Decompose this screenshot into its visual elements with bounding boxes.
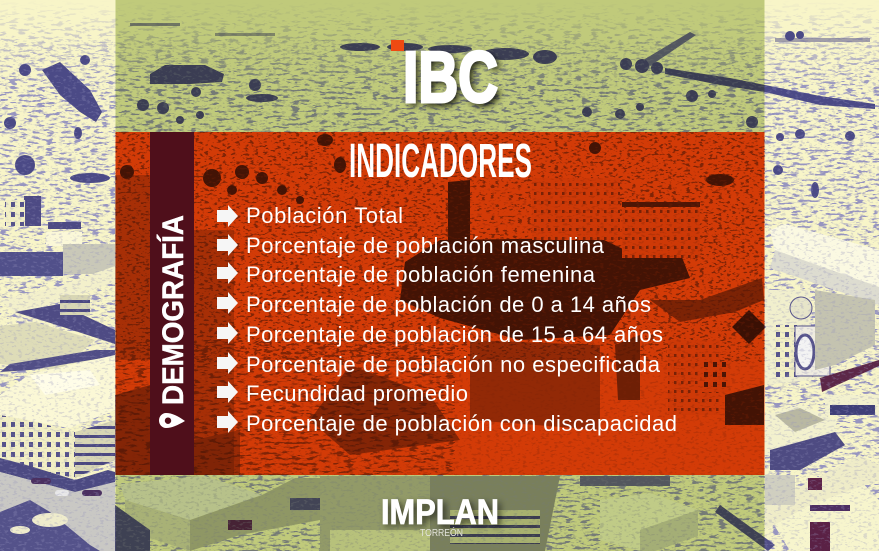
translucent green band: bottom — [116, 475, 764, 551]
icon: orange square — [391, 40, 404, 51]
panel: red indicators — [116, 132, 764, 475]
left buildings, mid — [24, 196, 41, 226]
tree rows — [4, 23, 875, 198]
item: población masculina: Porcentaje de población masculina — [246, 233, 605, 258]
lower central warehouse — [120, 476, 262, 520]
item: población 0 a 14 años: Porcentaje de población de 0 a 14 años — [246, 292, 651, 317]
lower right — [600, 493, 698, 551]
street, lower left — [0, 472, 115, 551]
icon: location pin — [159, 413, 185, 428]
item: fecundidad promedio: Fecundidad promedio — [246, 381, 468, 406]
heading: indicadores: INDICADORES — [349, 135, 532, 188]
item: población 15 a 64 años: Porcentaje de población de 15 a 64 años — [246, 322, 663, 347]
logo: IBC: IBC — [403, 38, 498, 118]
item: población con discapacidad: Porcentaje de población con discapacidad — [246, 411, 677, 436]
central photo, inside the red panel — [115, 132, 765, 475]
translucent green band: top — [116, 0, 764, 132]
indicator list — [217, 203, 677, 436]
logo: implan torreón: TORREÓN — [420, 526, 463, 539]
item: población femenina: Porcentaje de población femenina — [246, 262, 596, 287]
heading: demografía: DEMOGRAFÍA — [156, 215, 190, 405]
logo: implan torreón: IMPLAN — [381, 493, 499, 532]
right buildings — [770, 224, 879, 288]
logo: IBC: IBC — [406, 39, 502, 122]
logo: IBC — [391, 38, 502, 122]
panel: demografía side band — [150, 132, 194, 475]
left buildings, lower — [0, 266, 115, 314]
item: población no especificada: Porcentaje de población no especificada — [246, 352, 661, 377]
item: población total: Población Total — [246, 203, 403, 228]
logo: implan torreón: IMPLAN — [384, 496, 502, 535]
